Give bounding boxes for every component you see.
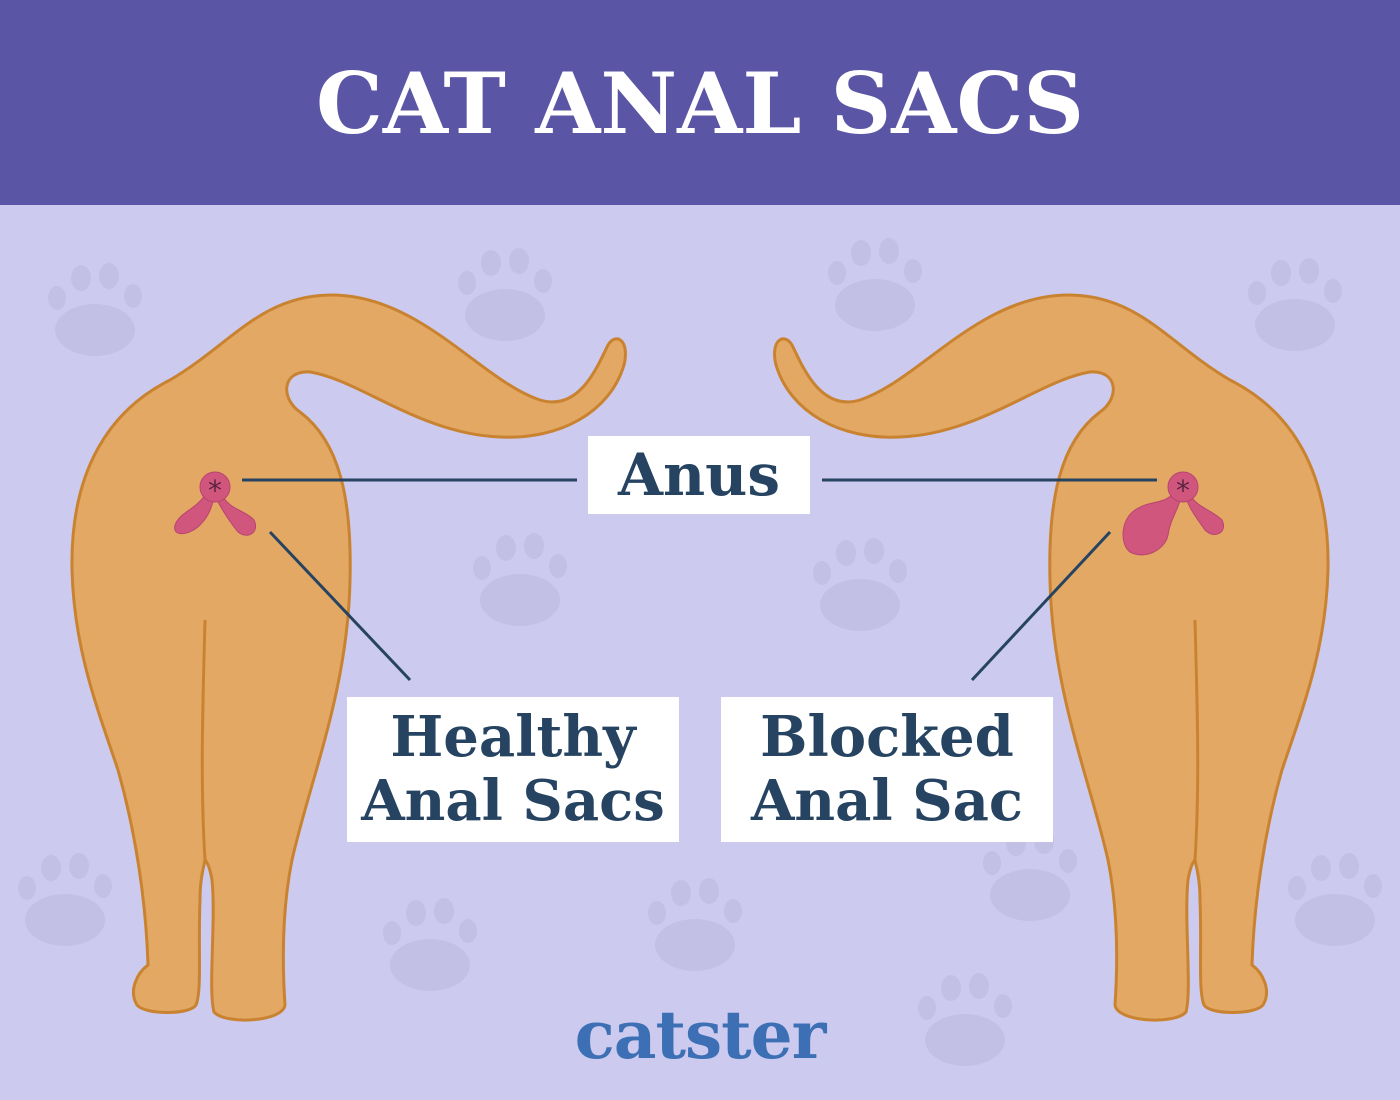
title: CAT ANAL SACS [316, 54, 1084, 153]
cat right: * [1176, 474, 1190, 507]
paw prints [18, 238, 1382, 1066]
blocked sac [1123, 472, 1224, 555]
label: blocked anal sac: Anal Sac [751, 768, 1023, 834]
label: healthy anal sacs: Healthy [390, 704, 636, 770]
label: anus: Anus [618, 441, 780, 509]
cat left [72, 295, 625, 1020]
header banner [0, 0, 1400, 205]
label: healthy anal sacs: Anal Sacs [361, 768, 665, 834]
logo: catster: catster [575, 996, 825, 1074]
leader lines [242, 480, 1157, 680]
label: healthy anal sacs [347, 697, 679, 842]
cat right [775, 295, 1328, 1020]
label: anus [588, 436, 810, 514]
label: blocked anal sac [721, 697, 1053, 842]
cat left: * [208, 474, 222, 507]
label: blocked anal sac: Blocked [760, 704, 1014, 770]
healthy sacs [175, 472, 256, 535]
